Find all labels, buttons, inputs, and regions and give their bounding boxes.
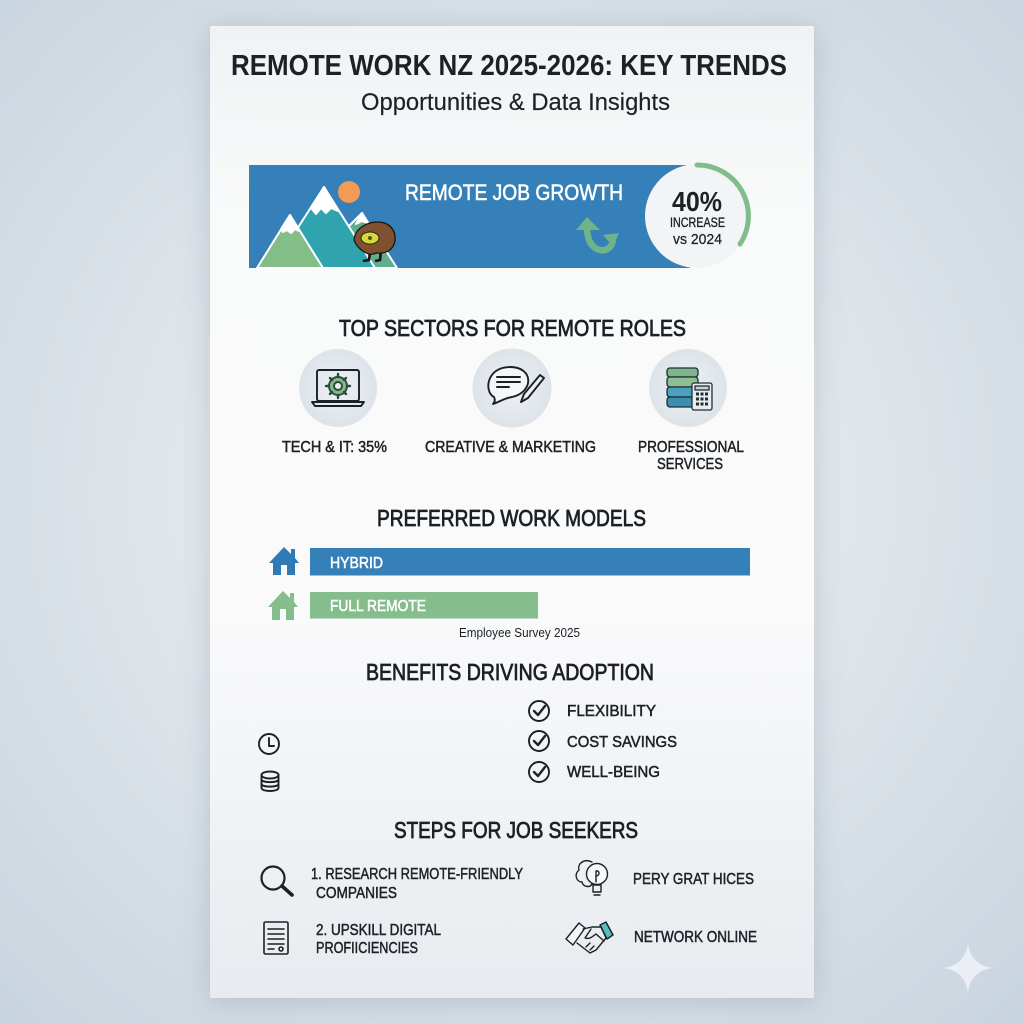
callout: 40 percent increase: vs 2024 [673,231,722,248]
sector: professional services [638,349,744,473]
icon: brain and bulb [576,861,608,895]
bar label: FULL REMOTE [330,598,426,615]
bar label: HYBRID [330,555,383,572]
step: research [262,866,523,902]
heading: preferred work models: PREFERRED WORK MODELS [377,505,646,531]
step: upskill [264,922,441,957]
icon: handshake [566,922,613,953]
label: PROFESSIONAL [638,439,744,456]
subtitle: Opportunities & Data Insights [361,89,670,116]
callout: 40 percent increase [645,164,749,268]
step: upskill: PROFIICIENCIES [316,940,418,957]
item: cost savings: COST SAVINGS [567,734,677,751]
heading: steps for job seekers: STEPS FOR JOB SEEKERS [394,817,638,843]
icon: growth arrow [576,217,619,250]
step: research: COMPANIES [316,885,397,902]
step: network online: NETWORK ONLINE [634,929,757,946]
item: well-being: WELL-BEING [567,764,660,781]
callout: 40 percent increase: INCREASE [670,214,725,230]
icon: blue house [269,547,299,575]
label: TECH & IT: 35% [282,439,387,456]
bar: hybrid [310,548,750,576]
title: REMOTE WORK NZ 2025-2026: KEY TRENDS [231,50,787,82]
caption: survey source: Employee Survey 2025 [459,626,580,640]
step: upskill: 2. UPSKILL DIGITAL [316,922,441,939]
item: cost savings [529,731,677,751]
icon: clock [259,734,279,754]
panel: remote job growth banner [249,164,749,268]
icon: books and calculator [667,368,712,410]
icon: magnifier [262,866,292,895]
icon: sun [338,181,360,203]
step: pery grat hices: PERY GRAT HICES [633,871,754,888]
icon: mountains [257,187,397,268]
heading: benefits: BENEFITS DRIVING ADOPTION [366,659,654,685]
panel: main card [210,26,814,998]
step: network online [566,922,757,953]
callout: 40 percent increase: 40% [672,186,722,217]
icon: sparkle watermark [943,943,993,993]
label: CREATIVE & MARKETING [425,439,596,456]
heading: remote job growth: REMOTE JOB GROWTH [405,180,623,205]
heading: top sectors: TOP SECTORS FOR REMOTE ROLES [339,315,686,341]
bar row: hybrid [269,547,750,576]
icon: green house [268,591,298,620]
item: flexibility: FLEXIBILITY [567,703,656,720]
list: benefits [529,701,677,782]
step: pery grat hices [576,861,754,895]
bar row: full remote [268,591,538,620]
label line 2: SERVICES [657,456,723,473]
icon: kiwi bird [354,222,395,261]
sector: creative and marketing [425,348,596,456]
icon: coins [262,772,278,791]
item: flexibility [529,701,656,721]
item: well-being [529,762,660,782]
step: research: 1. RESEARCH REMOTE-FRIENDLY [311,866,523,883]
bar: full remote [310,592,538,618]
icon: speech bubble and pencil [488,367,544,404]
icon: document [264,922,288,954]
sector: tech and IT [282,349,387,456]
icon: laptop with gear [312,370,364,406]
